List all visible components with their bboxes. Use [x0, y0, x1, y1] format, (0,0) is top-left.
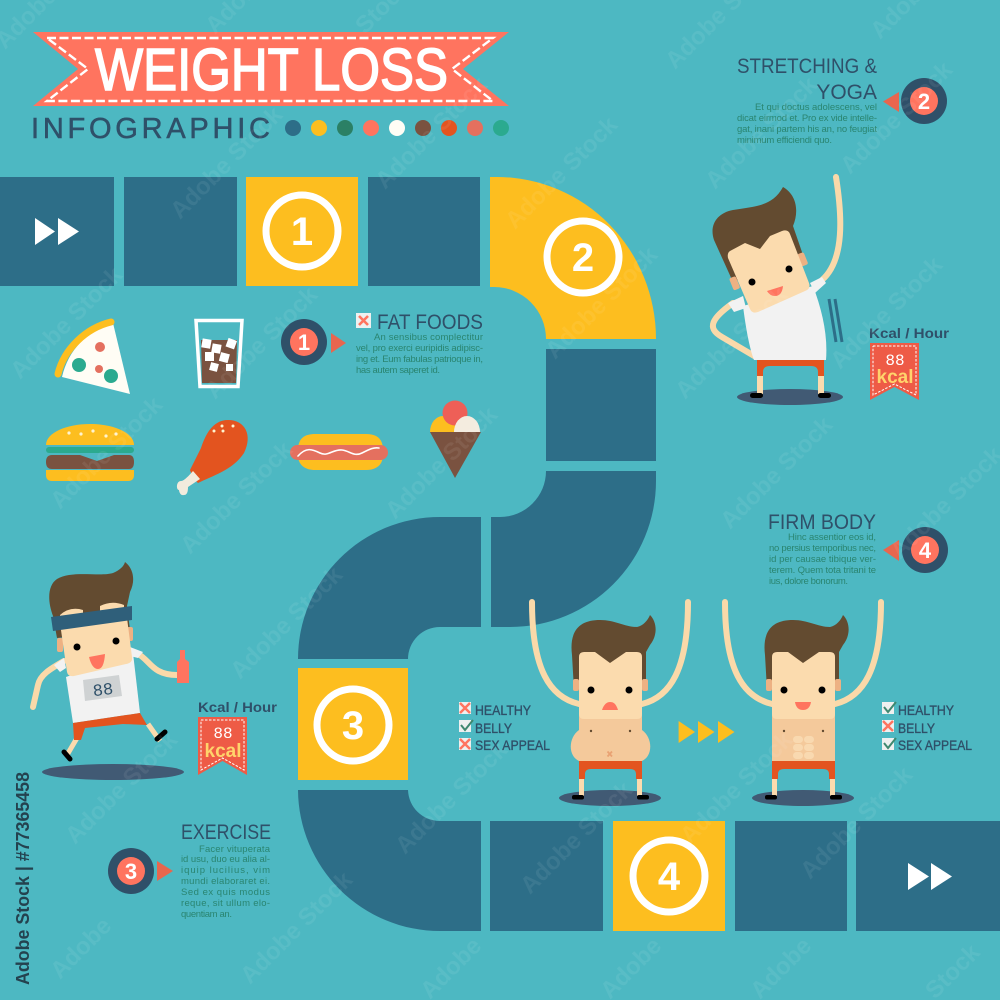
text: Adobe Stock	[675, 726, 798, 849]
checklist: after: HEALTHY	[898, 702, 955, 718]
character: man after, with abs	[725, 602, 881, 806]
section: exercise: EXERCISE	[181, 821, 271, 844]
section: exercise: quentiam an.	[181, 909, 232, 920]
checklist: before: BELLY	[475, 720, 513, 736]
section: stretching and yoga: gat, inani partem his an, no feugiat	[737, 124, 877, 135]
section: firm body: Hinc assentior eos id,	[788, 532, 876, 543]
badge: number 2	[883, 78, 947, 124]
text: Adobe Stock	[540, 241, 663, 364]
section: exercise: Facer vituperata	[199, 844, 271, 855]
text: Adobe Stock	[670, 281, 793, 404]
text: Adobe Stock	[225, 561, 348, 684]
section: exercise: reque, sit ullum elo-	[181, 898, 270, 909]
badge: kcal counter (stretching): 88	[885, 352, 905, 370]
section: stretching and yoga: YOGA	[816, 81, 877, 104]
section: exercise: iquip lucilius, vim	[181, 865, 270, 876]
icon: chicken drumstick	[177, 420, 248, 495]
section: exercise: Sed ex quis modus	[181, 887, 270, 898]
arrows: progress	[679, 721, 734, 743]
badge: kcal counter (stretching): kcal	[877, 367, 913, 388]
section: fat foods: ing et. Eum fabulas patrioque in,	[356, 354, 483, 365]
section: stretching and yoga: dicat eirmod et. Pro ex vide intelle-	[737, 113, 877, 124]
section: firm body: FIRM BODY	[768, 511, 876, 534]
checklist: after: SEX APPEAL	[898, 737, 972, 753]
text: Adobe Stock	[60, 726, 183, 849]
section: firm body: id per causae tibique ver-	[769, 554, 876, 565]
badge: kcal counter (exercise): 88	[213, 725, 233, 743]
section: exercise	[181, 821, 271, 920]
section: stretching and yoga: Et qui doctus adolescens, vel	[755, 102, 877, 113]
stock id label: Adobe Stock | #77365458	[13, 772, 33, 985]
text: Adobe Stock	[825, 251, 948, 374]
board path: curve with step 2: 2	[572, 236, 594, 280]
badge: number 1	[281, 319, 346, 365]
section: firm body: terem. Quem tota tritani te	[769, 565, 876, 576]
label: kcal per hour (exercise): Kcal / Hour	[198, 699, 278, 715]
board path: step 3	[298, 668, 408, 780]
text: Adobe Stock	[390, 736, 513, 859]
character: running man	[33, 562, 189, 780]
badge: number 4	[883, 527, 948, 573]
section: exercise: mundi elaboraret ei.	[181, 876, 270, 887]
text: Adobe Stock	[500, 111, 623, 234]
colour palette dots	[285, 120, 509, 136]
section: fat foods: FAT FOODS	[377, 311, 483, 334]
text: Adobe Stock	[700, 71, 823, 194]
icon: ice cream	[430, 400, 481, 478]
checklist: after	[882, 702, 972, 753]
icon: hot dog	[290, 434, 388, 470]
icon: pizza	[58, 322, 130, 394]
text: Adobe Stock	[515, 776, 638, 899]
checklist: before: SEX APPEAL	[475, 737, 550, 753]
text: Adobe Stock	[835, 56, 958, 179]
checklist: before	[459, 702, 550, 753]
character: stretching man	[713, 177, 843, 405]
section: fat foods: vel, pro exerci euripidis adipisc-	[356, 343, 483, 354]
section: firm body: no persius temporibus nec,	[769, 543, 876, 554]
text: Adobe Stock	[45, 391, 168, 514]
character: man before, with belly	[532, 602, 688, 806]
section: exercise: id usu, duo eu alia al-	[181, 854, 270, 865]
text: Adobe Stock	[380, 401, 503, 524]
checklist: before: HEALTHY	[475, 702, 532, 718]
text: Adobe	[45, 912, 117, 984]
subtitle: INFOGRAPHIC	[31, 113, 270, 145]
checklist: after: BELLY	[898, 720, 936, 736]
badge: number 1: 1	[298, 330, 310, 355]
board path: bottom row: 4	[658, 855, 681, 899]
section: fat foods: An sensibus complectitur	[374, 332, 483, 343]
text: Adobe Stock	[235, 866, 358, 989]
badge: kcal counter (exercise)	[198, 717, 247, 775]
text: Adobe Stock	[165, 101, 288, 224]
text: Adobe Stock	[370, 71, 493, 194]
badge: number 2: 2	[918, 89, 930, 114]
board path: middle segments	[298, 349, 656, 659]
label: kcal per hour (stretching): Kcal / Hour	[869, 325, 950, 341]
icon: soda glass	[196, 320, 242, 386]
section: stretching and yoga	[737, 55, 877, 146]
badge: number 4: 4	[919, 538, 932, 563]
badge: number 3: 3	[125, 859, 137, 884]
section: stretching and yoga: STRETCHING &	[737, 55, 877, 78]
section: stretching and yoga: minimum efficiendi quo.	[737, 135, 832, 146]
title banner: WEIGHT LOSS	[95, 37, 448, 103]
section: fat foods	[356, 311, 483, 376]
board path: curve with step 2	[490, 177, 656, 339]
badge: kcal counter (exercise): kcal	[205, 741, 241, 762]
character: running man: 88	[92, 681, 114, 702]
section: fat foods: has autem saperet id.	[356, 365, 440, 376]
text: Adobe Stock	[795, 761, 918, 884]
badge: number 3	[108, 848, 173, 894]
board path: bottom row	[298, 790, 1000, 931]
section: firm body	[768, 511, 876, 587]
icon: burger	[46, 424, 134, 481]
section: firm body: ius, dolore bonorum.	[769, 576, 848, 587]
board path: step 3: 3	[342, 704, 364, 748]
text: Adobe Stock	[200, 281, 323, 404]
text: Adobe Stock	[715, 411, 838, 534]
text: Adobe Stock	[5, 261, 128, 384]
badge: kcal counter (stretching)	[870, 343, 919, 400]
board path: top row	[0, 177, 480, 286]
board path: top row: 1	[291, 210, 313, 254]
text: Adobe Stock	[175, 436, 298, 559]
